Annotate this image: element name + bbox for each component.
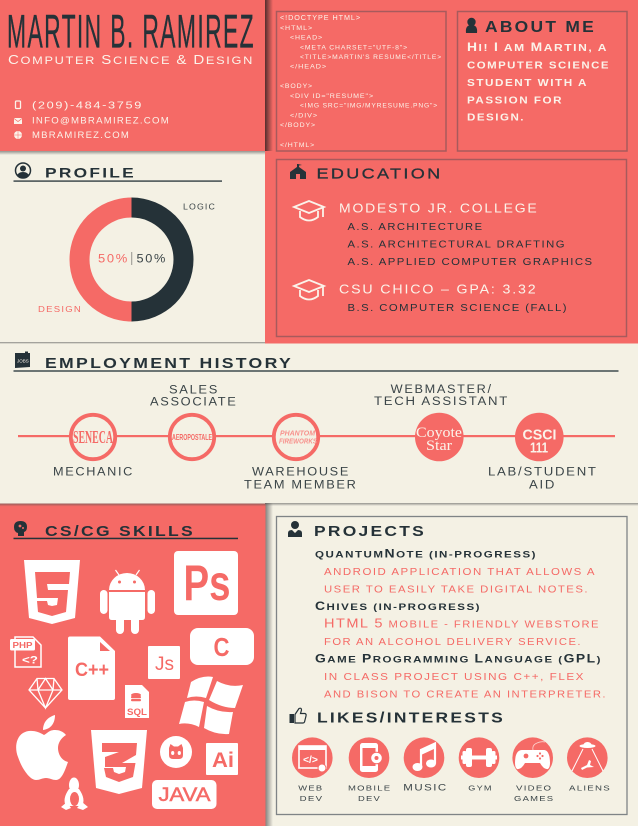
- job labels: WAREHOUSE: [252, 467, 350, 479]
- donut chart: 50%: [136, 254, 167, 266]
- project: quantumnote: USER TO EASILY TAKE DIGITAL NOTES.: [324, 585, 589, 596]
- interest: video games: VIDEO: [516, 784, 552, 793]
- icon: head with gears: [14, 521, 27, 536]
- icon: profile: [16, 163, 30, 178]
- job labels: SALES: [169, 384, 219, 396]
- icon: photoshop: [174, 551, 238, 615]
- panel: education: A.S. ARCHITECTURAL DRAFTING: [348, 240, 566, 251]
- heading: likes: LIKES/INTERESTS: [317, 710, 505, 726]
- icon: java: [152, 780, 216, 809]
- timeline: [18, 413, 615, 461]
- heading: profile: PROFILE: [45, 165, 136, 181]
- job: seneca: [71, 415, 115, 459]
- project: gpl: IN CLASS PROJECT USING C++, FLEX: [324, 672, 585, 683]
- panel: code snippet: <DIV ID="RESUME">: [290, 94, 374, 100]
- heading: skills: CS/CG SKILLS: [45, 524, 195, 540]
- icon: jobs: JOBS: [17, 358, 29, 364]
- icon: graduation cap: [294, 201, 324, 220]
- interest: web dev: WEB: [298, 784, 323, 793]
- panel: employment history: [0, 344, 638, 504]
- job: csci 111: CSCI: [522, 426, 556, 444]
- project: chives: FOR AN ALCOHOL DELIVERY SERVICE.: [324, 637, 582, 648]
- project: chives: [315, 601, 600, 648]
- job labels: AID: [529, 480, 556, 492]
- panel: education: A.S. ARCHITECTURE: [348, 222, 484, 233]
- icon: person: [288, 521, 302, 537]
- heading: employment: EMPLOYMENT HISTORY: [45, 355, 293, 372]
- interest: aliens: [567, 737, 611, 793]
- heading: education: EDUCATION: [316, 165, 442, 182]
- job labels: WEBMASTER/: [391, 384, 493, 396]
- icon: sql file: [125, 685, 149, 718]
- icon: mail: [14, 118, 22, 124]
- icon: thumbs up: [290, 708, 306, 723]
- school: modesto: MODESTO JR. COLLEGE: [339, 201, 538, 215]
- job labels: ASSOCIATE: [150, 396, 238, 408]
- job labels: TEAM MEMBER: [244, 480, 358, 492]
- icon: graduation cap: [294, 280, 324, 300]
- panel: profile: [14, 163, 222, 322]
- panel: code snippet: [276, 12, 446, 151]
- icon: github: [160, 736, 192, 768]
- panel: code snippet: <HTML>: [280, 26, 313, 32]
- interest: web dev: </>: [303, 755, 318, 766]
- donut chart: [38, 198, 216, 322]
- about text: COMPUTER SCIENCE: [467, 60, 610, 72]
- job: phantom fireworks: [274, 415, 318, 459]
- about text: DESIGN.: [467, 113, 525, 124]
- about text: HI! I AM MARTIN, A: [467, 42, 608, 54]
- panel: code snippet: </DIV>: [290, 114, 318, 120]
- icon: c++ file: C++: [75, 660, 109, 681]
- panel: code snippet: </BODY>: [280, 123, 316, 129]
- project: quantumnote: QUANTUM NOTE (IN-PROGRESS): [315, 548, 537, 560]
- icon: windows: [179, 677, 243, 734]
- job labels: [53, 384, 598, 492]
- panel: skills: [0, 503, 273, 826]
- website: MBRAMIREZ.COM: [32, 130, 130, 140]
- icon: java: JAVA: [158, 785, 211, 806]
- icon: html5: [24, 560, 80, 624]
- panel: projects: [276, 516, 627, 814]
- icon: php file: <?: [22, 654, 38, 666]
- job labels: MECHANIC: [53, 467, 134, 479]
- panel: code snippet: </HEAD>: [290, 65, 327, 71]
- icon: c++ file: [68, 636, 115, 700]
- panel: code snippet: <HEAD>: [290, 36, 323, 42]
- project: chives: CHIVES (IN-PROGRESS): [315, 601, 481, 613]
- icon: illustrator: [206, 743, 238, 775]
- panel: code snippet: <META CHARSET="UTF-8">: [300, 46, 408, 52]
- heading: about me: ABOUT ME: [485, 19, 596, 36]
- icon: c language: C: [214, 632, 230, 662]
- job: phantom fireworks: FIREWORKS: [279, 438, 317, 446]
- interest: web dev: [292, 737, 333, 803]
- project: gpl: [315, 654, 607, 701]
- job: coyote star: Coyote: [416, 425, 462, 441]
- icon: apple: [16, 715, 68, 780]
- interest: mobile dev: MOBILE: [348, 784, 391, 793]
- donut chart: DESIGN: [38, 305, 82, 314]
- subtitle: COMPUTER SCIENCE & DESIGN: [8, 52, 254, 67]
- interest: aliens: ALIENS: [569, 784, 611, 793]
- project: gpl: AND BISON TO CREATE AN INTERPRETER.: [324, 690, 607, 701]
- job: csci 111: [515, 413, 564, 461]
- icon: linux penguin: [61, 778, 88, 810]
- interest: web dev: DEV: [300, 794, 323, 803]
- icon: php file: [10, 637, 41, 667]
- icon: css3: [91, 730, 147, 794]
- panel: education: A.S. APPLIED COMPUTER GRAPHICS: [348, 257, 594, 268]
- interest: music: [403, 737, 448, 792]
- about text: [467, 42, 610, 124]
- panel: code snippet: <IMG SRC="IMG/MYRESUME.PNG">: [300, 104, 438, 110]
- email: INFO@MBRAMIREZ.COM: [32, 116, 170, 126]
- panel: code snippet: </HTML>: [280, 143, 315, 149]
- project: quantumnote: ANDROID APPLICATION THAT ALLOWS A: [324, 567, 596, 578]
- panel: education: [276, 160, 626, 336]
- panel: header: MARTIN B. RAMIREZ: [7, 4, 255, 58]
- panel: code and about background: [265, 0, 638, 344]
- job: seneca: SENECA: [73, 427, 113, 447]
- job: phantom fireworks: PHANTOM: [280, 430, 315, 438]
- job: coyote star: Star: [426, 438, 452, 454]
- icon: school: [290, 164, 306, 179]
- phone number: (209)-484-3759: [32, 100, 143, 112]
- project: gpl: GAME PROGRAMMING LANGUAGE ( GPL ): [315, 654, 602, 666]
- interest: gym: GYM: [468, 784, 493, 793]
- interest: music: MUSIC: [403, 782, 448, 792]
- panel: code snippet: <!DOCTYPE HTML>: [280, 15, 361, 22]
- panel: education: B.S. COMPUTER SCIENCE (FALL): [348, 303, 568, 314]
- panel: about me: [458, 12, 627, 151]
- job labels: TECH ASSISTANT: [374, 396, 509, 408]
- icon: phone: [16, 101, 20, 108]
- interest: video games: [512, 737, 554, 803]
- icon: android: [100, 570, 155, 634]
- icon: javascript: [148, 646, 180, 679]
- icon: javascript: Js: [155, 654, 174, 675]
- school: csu chico: CSU CHICO – GPA: 3.32: [339, 282, 538, 296]
- icon: globe: [14, 131, 22, 139]
- icon: photoshop: Ps: [184, 555, 230, 611]
- icon: php file: PHP: [12, 641, 33, 650]
- project: quantumnote: [315, 548, 596, 596]
- job: aeropostale: AEROPOSTALE: [172, 432, 212, 442]
- icon: bearded man: [466, 18, 477, 33]
- interest: mobile dev: DEV: [358, 794, 381, 803]
- about text: STUDENT WITH A: [467, 78, 588, 89]
- heading: projects: PROJECTS: [314, 524, 426, 540]
- project: chives: HTML 5 MOBILE - FRIENDLY WEBSTORE: [324, 616, 600, 631]
- icon: jobs: [15, 352, 30, 368]
- about text: PASSION FOR: [467, 96, 563, 106]
- icon: sql file: SQL: [127, 707, 148, 717]
- job: coyote star: [415, 413, 464, 461]
- interest: video games: GAMES: [514, 794, 554, 803]
- icon: c language: [190, 628, 254, 665]
- donut chart: 50%: [98, 254, 129, 266]
- panel: header: [0, 0, 273, 155]
- job: aeropostale: [170, 415, 214, 459]
- icon: illustrator: Ai: [212, 749, 234, 772]
- job labels: LAB/STUDENT: [488, 467, 598, 479]
- interest: gym: [459, 737, 499, 793]
- job: csci 111: 111: [530, 440, 548, 456]
- panel: code snippet: <TITLE>MARTIN'S RESUME</TITLE>: [300, 55, 442, 61]
- donut chart: LOGIC: [183, 203, 216, 212]
- interest: mobile dev: [348, 737, 391, 803]
- icon: ruby gem: [29, 678, 62, 708]
- panel: code snippet: <BODY>: [280, 84, 313, 90]
